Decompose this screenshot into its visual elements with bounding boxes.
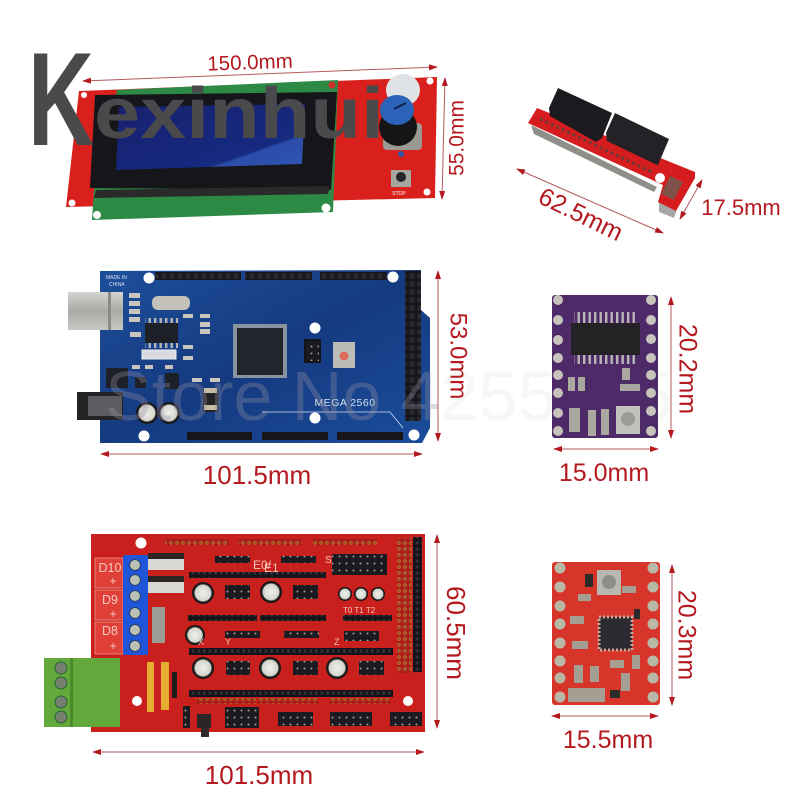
dimension: 20.3mm: 20.3mm [672,590,700,680]
silk labels: Y [225,637,231,647]
dimension: A4988 height arrow [671,565,673,705]
Mega 2560 silk label: MEGA 2560 [314,397,376,409]
yellow fuses [147,662,169,712]
silk labels: E1 [264,561,279,575]
adapter silver edge connector [531,125,657,192]
silk labels: T0 T1 T2 [343,606,376,615]
Mega silk traces [262,412,403,428]
LCD lower strip [94,186,330,198]
A4988 pins [554,562,658,702]
watermark text on white: Store No 4255505 [105,357,673,435]
four pin pads [142,350,176,359]
watermark: store number [105,357,673,435]
green power terminal [44,658,120,727]
D10 D9 D8 label block [95,558,123,654]
silk labels: Z [334,637,340,647]
third mount hole [132,696,142,706]
MOSFETs [148,553,184,643]
A4988 trim pot [597,570,621,595]
dimension: 101.5mm: 101.5mm [205,760,313,790]
DRV chip [571,312,640,364]
panel: DRV8825 driver [552,295,658,438]
dimension: RAMPS height arrow [436,535,438,728]
dimension: DRV width arrow [554,448,658,450]
D10 D9 D8 label block: + [109,639,117,653]
LCD green backing PCB [92,80,338,220]
blue terminal block [123,555,148,655]
reset button [333,342,355,368]
driver jumper blocks [225,585,384,675]
panel: A4988 driver [552,562,660,705]
RAMPS red PCB [91,534,425,732]
reset button [197,714,211,737]
panel: LCD controller board [66,74,437,220]
dimension: 20.2mm: 20.2mm [673,324,701,414]
crystal [152,296,190,310]
dimension: RAMPS width arrow [93,751,424,753]
panel: RAMPS board [44,534,425,737]
stop button: STOP [392,191,406,197]
mount hole [136,538,146,548]
adapter red PCB [528,108,695,211]
DRV purple PCB [552,295,658,438]
D10 D9 D8 label block: D9 [102,593,118,607]
D10 D9 D8 label block: + [109,574,117,588]
adapter connector two [606,113,669,165]
Made in China silk: CHINA [109,282,125,288]
dimension: 101.5mm: 101.5mm [203,460,311,490]
dimension: LCD width arrow [83,67,437,81]
dimension: 62.5mm: 62.5mm [534,182,627,247]
A4988 red PCB [552,562,660,705]
dimension: Mega height arrow [437,271,439,441]
adapter hole [655,173,665,183]
Mega blue PCB [100,270,430,443]
dimension: adapter length arrow [517,169,663,233]
adapter pins [661,176,683,200]
dimension: A4988 width arrow [552,715,658,717]
D10 D9 D8 label block: D10 [99,561,122,575]
dimension: 55.0mm: 55.0mm [445,100,468,176]
driver components [203,388,218,412]
adapter pin row [540,119,652,172]
adapter connector one [549,88,612,142]
dimension: 15.0mm: 15.0mm [559,459,649,487]
dimension: 53.0mm: 53.0mm [445,313,472,399]
regulators [106,368,179,389]
dimension: adapter width arrow [680,180,702,219]
dimension: 17.5mm: 17.5mm [701,195,781,220]
watermark letter K: K [28,26,94,174]
Mega right header [405,271,421,421]
USB chip [145,318,178,348]
panel: Mega 2560 board [68,270,430,443]
ICSP header [305,340,320,362]
LCD blue window [116,104,305,170]
watermark text on board: Store No 4 [105,357,440,435]
DRV trim pot [616,406,640,434]
microstep jumpers [215,556,379,641]
A4988 components [568,574,640,702]
silk labels: E0/ [253,558,272,572]
Mega top headers [155,272,387,280]
panel: adapter board [528,88,695,218]
ATmega chip [233,324,287,378]
dimension: 60.5mm: 60.5mm [441,586,471,680]
buzzer [386,74,420,106]
adapter silver leg [659,200,677,218]
stepper sockets [188,572,393,697]
Mega bottom headers [187,432,403,440]
stop button [391,170,411,197]
silk labels: X [198,637,204,647]
dimension: Mega width arrow [101,453,422,455]
DRV pins [553,295,656,436]
Made in China silk: MADE IN [106,275,127,281]
D10 D9 D8 label block: D8 [102,624,118,638]
dimension: 15.5mm: 15.5mm [563,726,653,754]
Mega capacitors [136,402,180,424]
DRV components [568,368,640,436]
large pin blocks [183,554,422,728]
dimension: LCD height arrow [442,78,445,199]
silk labels: S [325,555,332,566]
power jack [77,392,123,420]
rotary encoder [379,95,422,157]
silk labels [198,555,376,647]
driver capacitors [185,581,385,679]
watermark: Kexinhui logo [28,26,384,174]
LCD black display housing [90,92,337,190]
RAMPS right pin block [397,538,412,673]
D10 D9 D8 label block: + [109,607,117,621]
dimension: DRV height arrow [670,297,672,438]
dimension: 150.0mm: 150.0mm [207,50,293,76]
diode [172,672,177,698]
USB connector [68,292,123,330]
Mega mount holes [138,272,420,442]
watermark letters exinhui: exinhui [94,74,384,154]
LCD red PCB [66,77,437,207]
small components [129,293,220,382]
RAMPS right header [413,537,422,672]
RAMPS upper pin rows [165,539,390,704]
A4988 chip [599,617,632,650]
second mount hole [403,696,413,706]
LCD mount holes [68,78,434,219]
